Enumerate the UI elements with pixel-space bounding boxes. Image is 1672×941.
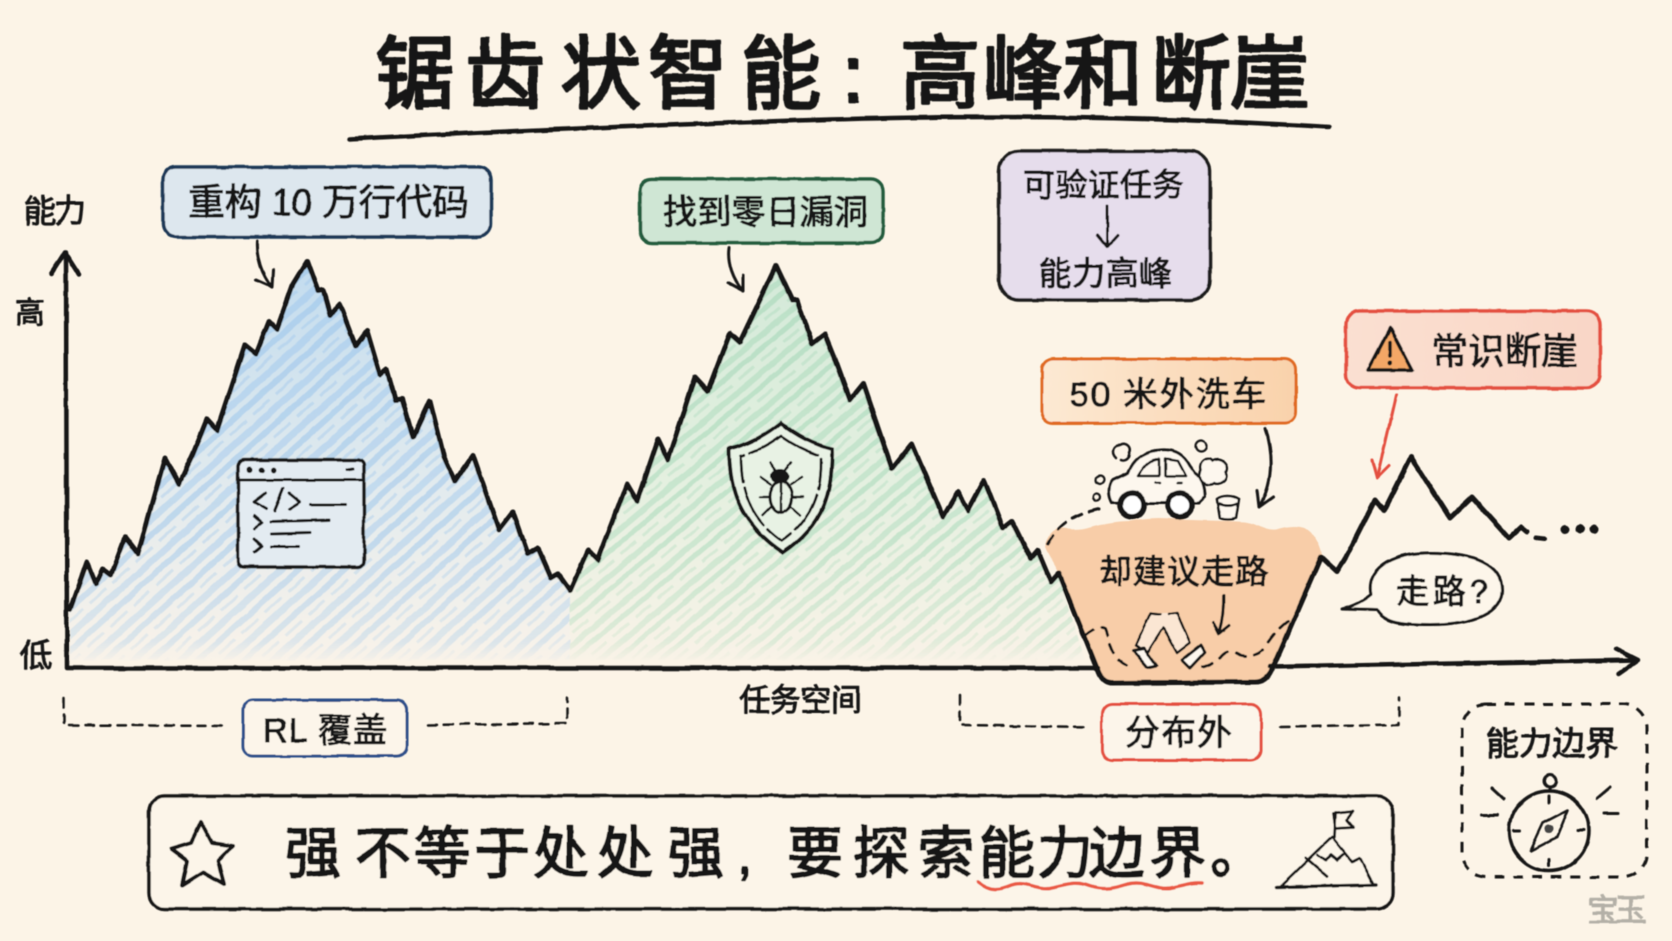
takeaway panel xyxy=(149,796,1393,909)
x axis xyxy=(67,649,1638,674)
callout: wash car 50 meters xyxy=(1042,359,1296,423)
icon: shield with bug xyxy=(729,423,832,553)
arrow to legs xyxy=(1213,595,1229,634)
bracket: out of distribution xyxy=(960,695,1399,760)
icon: bucket xyxy=(1217,496,1239,520)
bracket: RL coverage xyxy=(64,698,567,756)
callout: common-sense cliff xyxy=(1346,311,1600,388)
callout: common-sense cliff: 常识断崖 xyxy=(1431,331,1578,372)
trailing dots xyxy=(1560,524,1598,534)
title: 锯齿状智能:高峰和断崖 xyxy=(375,30,1310,119)
icon: walking legs xyxy=(1133,613,1205,668)
panel: capability boundary compass: 能力边界 xyxy=(1486,725,1618,762)
callout: refactor 100k lines: 重构 10 万行代码 xyxy=(188,182,469,223)
arrow to car xyxy=(1257,428,1273,507)
arrow to green peak xyxy=(728,248,743,291)
icon: star xyxy=(171,822,233,885)
speech bubble: walk? xyxy=(1342,553,1502,625)
panel: capability boundary compass xyxy=(1462,704,1647,877)
x axis label: task space: 任务空间 xyxy=(739,683,862,718)
blue peak hatched fill xyxy=(70,261,570,660)
y axis labels: 低 xyxy=(19,637,52,674)
text: suggests walking: 却建议走路 xyxy=(1099,553,1268,590)
dashed path over pit xyxy=(1047,509,1099,546)
capability curve xyxy=(70,261,1545,683)
purple box: verifiable tasks to peak: 可验证任务 xyxy=(1023,167,1184,203)
y axis labels: 高 xyxy=(15,297,45,330)
takeaway text: 强不等于处处强,要探索能力边界。 xyxy=(285,822,1266,885)
icon: code window xyxy=(238,460,364,567)
dashed trail in pit xyxy=(1085,620,1290,667)
purple box: verifiable tasks to peak: 能力高峰 xyxy=(1039,255,1172,292)
y axis labels: 能力 xyxy=(24,193,86,229)
icon: mountain with flag xyxy=(1277,812,1376,887)
red squiggle underline xyxy=(978,882,1202,889)
bracket: out of distribution: 分布外 xyxy=(1125,714,1232,753)
callout: find zero-day: 找到零日漏洞 xyxy=(663,194,868,232)
icon: compass xyxy=(1482,775,1618,871)
y axis labels xyxy=(15,193,86,674)
orange pit fill xyxy=(1045,518,1322,682)
y axis xyxy=(51,252,79,667)
green peak hatched fill xyxy=(570,266,1085,660)
arrow to blue peak xyxy=(256,241,273,287)
callout: wash car 50 meters: 50 米外洗车 xyxy=(1070,376,1266,414)
watermark: 宝玉 xyxy=(1587,892,1647,928)
icon: car being washed xyxy=(1093,440,1227,517)
bracket: RL coverage: RL 覆盖 xyxy=(263,712,387,750)
purple box: verifiable tasks to peak xyxy=(999,151,1210,300)
speech bubble: walk?: 走路? xyxy=(1396,573,1488,610)
callout: find zero-day xyxy=(640,179,883,243)
red arrow to cliff xyxy=(1372,395,1396,478)
callout: refactor 100k lines xyxy=(163,167,491,237)
